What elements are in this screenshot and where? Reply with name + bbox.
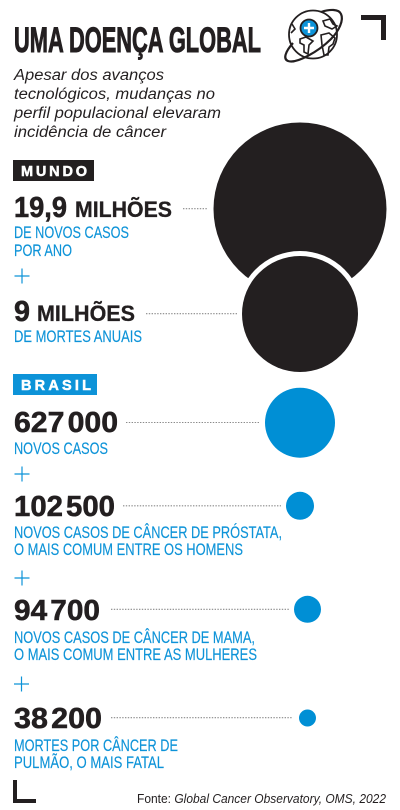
subtitle: tecnológicos, mudanças no bbox=[14, 86, 215, 103]
stat: 627 000: NOVOS CASOS bbox=[14, 440, 108, 458]
circle: breast cases bbox=[294, 596, 321, 623]
plus bbox=[14, 268, 30, 284]
stat: 102 500: O MAIS COMUM ENTRE OS HOMENS bbox=[14, 541, 243, 559]
stat: 94 700 bbox=[14, 595, 289, 664]
stat: 102 500: NOVOS CASOS DE CÂNCER DE PRÓSTATA, bbox=[14, 523, 282, 542]
subtitle: Apesar dos avanços bbox=[13, 67, 164, 84]
circle: Brazil new cases bbox=[265, 388, 335, 458]
stat: 19,9 milhões: DE NOVOS CASOS bbox=[14, 224, 129, 242]
bottom left corner mark bbox=[13, 780, 36, 803]
label: BRASIL bbox=[13, 374, 97, 395]
stat: 38 200 bbox=[14, 703, 293, 772]
circle: world new cases bbox=[214, 122, 386, 296]
stat: 94 700: 94 700 bbox=[14, 595, 100, 627]
plus bbox=[14, 466, 30, 482]
top right corner mark bbox=[361, 15, 386, 40]
label: MUNDO: MUNDO bbox=[21, 164, 87, 180]
stat: 38 200: 38 200 bbox=[14, 703, 102, 735]
stat: 19,9 milhões: MILHÕES bbox=[75, 197, 172, 222]
stat: 19,9 milhões: 19,9 bbox=[14, 192, 67, 224]
circle: prostate cases bbox=[286, 492, 314, 520]
stat: 9 milhões bbox=[14, 296, 238, 346]
stat: 94 700: O MAIS COMUM ENTRE AS MULHERES bbox=[14, 646, 257, 664]
subtitle: incidência de câncer bbox=[14, 124, 167, 141]
stat: 627 000 bbox=[14, 407, 260, 458]
stat: 102 500 bbox=[14, 491, 282, 559]
label: MUNDO bbox=[13, 160, 94, 181]
plus bbox=[14, 570, 30, 586]
subtitle: perfil populacional elevaram bbox=[13, 105, 221, 122]
label: BRASIL: BRASIL bbox=[21, 378, 91, 394]
circle: world deaths bbox=[237, 251, 363, 377]
stat: 38 200: PULMÃO, O MAIS FATAL bbox=[14, 752, 164, 772]
stat: 9 milhões: DE MORTES ANUAIS bbox=[14, 328, 142, 346]
icon: globe with medical cross bbox=[285, 10, 342, 61]
circle: lung deaths bbox=[299, 710, 316, 726]
stat: 9 milhões: 9 bbox=[14, 296, 30, 328]
stat: 38 200: MORTES POR CÂNCER DE bbox=[14, 736, 178, 755]
stat: 9 milhões: MILHÕES bbox=[37, 301, 135, 326]
stat: 102 500: 102 500 bbox=[14, 491, 115, 523]
stat: 94 700: NOVOS CASOS DE CÂNCER DE MAMA, bbox=[14, 628, 255, 647]
source: Fonte: Global Cancer Observatory, OMS, 2022 bbox=[137, 792, 386, 806]
stat: 19,9 milhões bbox=[14, 192, 208, 260]
subtitle bbox=[13, 67, 221, 141]
stat: 627 000: 627 000 bbox=[14, 407, 118, 439]
stat: 19,9 milhões: POR ANO bbox=[14, 242, 72, 260]
plus bbox=[14, 676, 29, 692]
